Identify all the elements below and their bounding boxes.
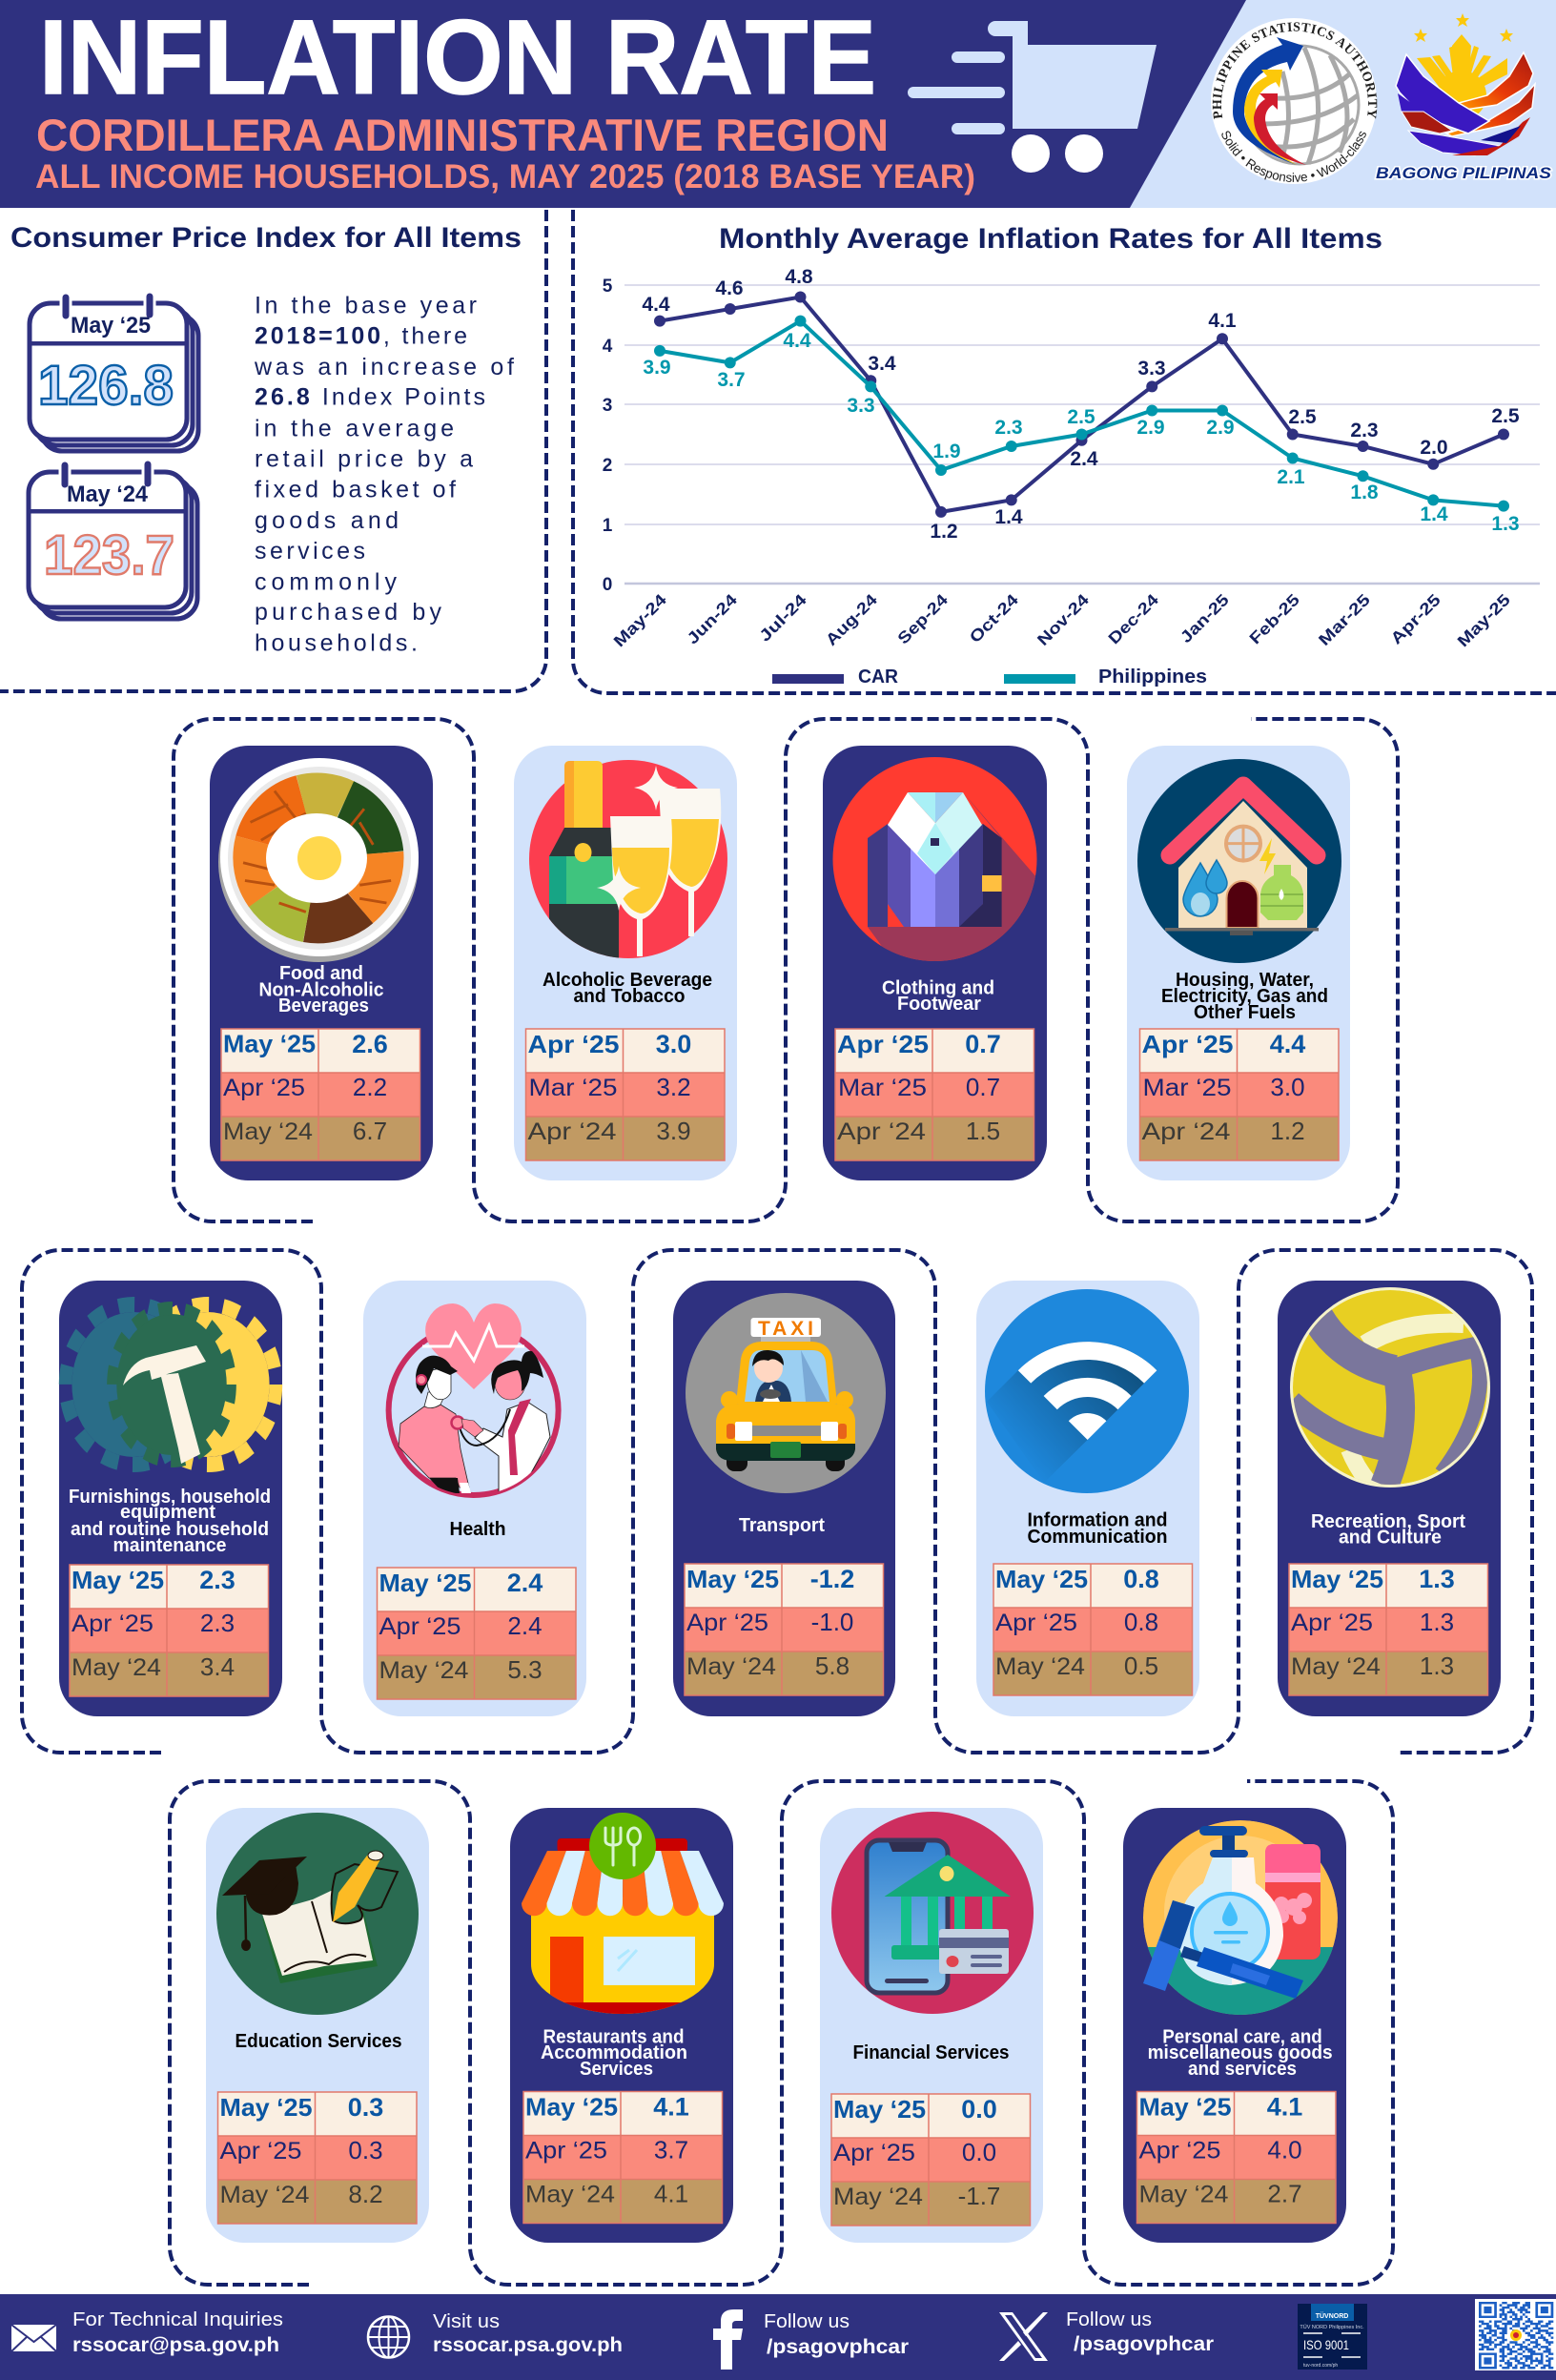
table: May ‘25 [72, 1566, 164, 1594]
series: CAR: 4.8 [785, 266, 813, 288]
category name [1028, 1510, 1167, 1548]
table: May ‘24 [686, 1653, 776, 1680]
icon: champagne [529, 760, 727, 963]
heading: monthly average inflation: Monthly Average Inflation Rates for All Items [719, 223, 1382, 255]
table: Apr ‘25 [379, 1613, 461, 1640]
category name: miscellaneous goods [1148, 2042, 1333, 2063]
table: Apr ‘25 [1138, 2138, 1220, 2165]
icon: shopping cart [908, 21, 1157, 173]
contact: website: Visit us [433, 2311, 500, 2332]
category name: Clothing and [882, 978, 994, 999]
series: Philippines: 4.4 [783, 330, 811, 352]
table [831, 2094, 1030, 2226]
table: 0.7 [965, 1030, 1001, 1058]
table: Apr ‘25 [219, 2138, 301, 2165]
x axis labels: Sep-24 [894, 590, 952, 647]
explanatory text: purchased by [255, 599, 442, 626]
table: Apr ‘25 [837, 1030, 929, 1058]
calendar: May 2024: 123.7 [44, 524, 174, 586]
series: Philippines [643, 316, 1520, 535]
table: May ‘24 [525, 2182, 615, 2208]
panel: food and non-alcoholic beverages [210, 746, 433, 1180]
table: May ‘24 [1291, 1653, 1381, 1680]
x axis labels: Dec-24 [1105, 590, 1162, 647]
line chart: 4 [603, 337, 613, 357]
category name: Personal care, and [1162, 2027, 1322, 2048]
category name: and Tobacco [574, 986, 685, 1007]
x axis labels: May-25 [1454, 590, 1514, 650]
table: 2.3 [199, 1566, 235, 1594]
calendar: May 2025 [30, 292, 198, 451]
logo: Bagong Pilipinas [1376, 13, 1552, 182]
table: May ‘24 [995, 1653, 1085, 1680]
table: 1.3 [1420, 1608, 1454, 1636]
series: CAR: 3.3 [1137, 358, 1166, 380]
panel: housing, water, electricity, gas [1127, 746, 1350, 1180]
table: Apr ‘25 [223, 1075, 305, 1101]
logo: Philippine Statistics Authority: PHILIPPINE STATISTICS AUTHORITY [1213, 22, 1377, 120]
x axis labels: Oct-24 [966, 590, 1022, 646]
table: 1.3 [1420, 1652, 1454, 1680]
contact: website [368, 2311, 623, 2357]
panel: recreation, sport and culture [1278, 1281, 1501, 1716]
category name: Information and [1028, 1510, 1167, 1531]
calendar: May 2025: May ‘25 [71, 313, 151, 339]
badge: ISO 9001: TÜVNORD [1316, 2311, 1348, 2320]
category name: Beverages [278, 995, 369, 1016]
series: CAR: 2.5 [1491, 405, 1520, 427]
series: CAR [642, 266, 1520, 543]
category name: Recreation, Sport [1311, 1511, 1465, 1532]
table: 0.5 [1124, 1652, 1158, 1680]
table: Apr ‘25 [72, 1611, 154, 1637]
table [1289, 1564, 1487, 1695]
table: 0.7 [966, 1073, 1000, 1101]
table [993, 1564, 1192, 1695]
icon: house with utilities [1137, 759, 1341, 963]
icon: doctor and patient [389, 1303, 559, 1497]
panel: health [363, 1281, 586, 1716]
category name [541, 2027, 687, 2080]
table: 1.5 [966, 1117, 1000, 1145]
contact: X: Follow us [1066, 2309, 1152, 2330]
x axis labels: Mar-25 [1315, 590, 1374, 649]
category name [259, 963, 383, 1016]
series: CAR: 4.4 [642, 294, 670, 316]
table: May ‘25 [833, 2095, 926, 2124]
series: Philippines: 1.3 [1491, 513, 1520, 535]
table: 3.0 [656, 1030, 691, 1058]
explanatory text: 2018=100, there [255, 323, 467, 350]
badge: ISO 9001: tuv-nord.com/ph [1303, 2363, 1338, 2369]
icon: mobile banking [831, 1812, 1034, 2014]
x axis labels: Aug-24 [822, 590, 881, 649]
line chart: 5 [603, 277, 613, 297]
table: Apr ‘24 [1142, 1118, 1231, 1145]
series: Philippines: 1.8 [1350, 482, 1379, 503]
logo: Philippine Statistics Authority [1211, 18, 1377, 184]
calendar: May 2025: 126.8 [38, 355, 174, 417]
table [221, 1029, 420, 1160]
table: 0.3 [348, 2136, 383, 2165]
x axis labels: Jun-24 [684, 590, 741, 647]
table: May ‘25 [1138, 2092, 1232, 2121]
panel: alcoholic beverage and tobacco [514, 746, 737, 1180]
category name [1311, 1511, 1465, 1549]
category name: and services [1188, 2059, 1297, 2080]
table: May ‘24 [72, 1654, 161, 1681]
icon: taxi: TAXI [758, 1318, 813, 1340]
table: -1.7 [958, 2182, 1000, 2210]
table: Apr ‘24 [528, 1118, 617, 1145]
line chart: 3 [603, 396, 612, 416]
series: CAR: 4.6 [715, 277, 744, 299]
line chart: 2 [603, 456, 612, 476]
table: May ‘25 [1291, 1565, 1383, 1593]
series: CAR: 2.3 [1350, 420, 1379, 441]
panel: transport [673, 1281, 895, 1716]
category name: equipment [120, 1502, 215, 1523]
category name [543, 970, 712, 1007]
icon: personal care products [1143, 1820, 1338, 2016]
table: Mar ‘25 [838, 1075, 927, 1101]
series: Philippines: 1.4 [1420, 503, 1448, 525]
table: 2.2 [353, 1073, 387, 1101]
table: May ‘24 [219, 2182, 310, 2208]
table: 2.6 [352, 1030, 388, 1058]
line chart [603, 266, 1540, 650]
badge: ISO 9001 [1298, 2304, 1367, 2370]
category name: Footwear [897, 994, 981, 1015]
x axis labels: Apr-25 [1387, 590, 1444, 647]
series: Philippines: 3.3 [847, 395, 875, 417]
table: 2.4 [507, 1611, 543, 1640]
table: 0.3 [348, 2093, 383, 2122]
table: Apr ‘25 [686, 1610, 768, 1636]
series: CAR: 3.4 [868, 353, 896, 375]
table: 4.4 [1270, 1030, 1305, 1058]
table: May ‘24 [833, 2184, 923, 2210]
explanatory text: was an increase of [254, 354, 514, 380]
explanatory text: 26.8 Index Points [255, 384, 485, 411]
category name: Communication [1028, 1527, 1167, 1548]
table: May ‘25 [223, 1030, 316, 1058]
footer [0, 2294, 1556, 2380]
category name: Services [580, 2059, 653, 2080]
category name: Transport [739, 1515, 825, 1536]
table: 0.0 [962, 2138, 996, 2166]
series: CAR: 4.1 [1208, 310, 1237, 332]
category name: Restaurants and [543, 2027, 685, 2048]
table: 4.1 [653, 2092, 689, 2121]
table: 1.3 [1419, 1565, 1455, 1593]
category name: Financial Services [852, 2042, 1009, 2063]
table: May ‘25 [686, 1565, 779, 1593]
explanatory text: goods and [255, 507, 399, 534]
table: -1.0 [811, 1608, 853, 1636]
calendar: May 2024 [29, 460, 197, 619]
calendar: May 2024: May ‘24 [67, 482, 149, 507]
icon: graduation cap and book [216, 1813, 419, 2015]
series: Philippines: 2.1 [1277, 466, 1305, 488]
table: 4.1 [654, 2180, 688, 2208]
category name: Furnishings, household [69, 1487, 271, 1508]
legend [772, 667, 1207, 687]
category name: Alcoholic Beverage [543, 970, 712, 991]
table: May ‘25 [995, 1565, 1088, 1593]
table: 2.4 [507, 1569, 543, 1597]
series: Philippines: 2.3 [994, 417, 1023, 439]
logo: Philippine Statistics Authority: Solid • Responsive • World-class [1221, 131, 1366, 182]
explanatory text: fixed basket of [255, 476, 456, 503]
table: Mar ‘25 [1142, 1075, 1232, 1101]
table [526, 1029, 725, 1160]
contact: website: rssocar.psa.gov.ph [433, 2334, 623, 2356]
badge: ISO 9001: ISO 9001 [1303, 2337, 1349, 2352]
table: 3.7 [654, 2136, 688, 2165]
contact: X: /psagovphcar [1074, 2333, 1214, 2355]
icon: wifi signal [985, 1289, 1189, 1493]
table: May ‘24 [223, 1118, 313, 1145]
table [523, 2092, 723, 2224]
table: 3.4 [200, 1652, 235, 1681]
table: 3.0 [1270, 1073, 1305, 1101]
panel: monthly inflation chart [573, 210, 1556, 693]
table: Mar ‘25 [528, 1075, 618, 1101]
table: Apr ‘25 [995, 1610, 1077, 1636]
icon: shirt and jacket [833, 757, 1037, 961]
explanatory text: In the base year [255, 292, 477, 318]
table: 0.0 [961, 2095, 997, 2124]
category name: Health [450, 1519, 505, 1540]
panel: restaurants and accommodation [510, 1808, 733, 2243]
heading: consumer price index: Consumer Price Index for All Items [10, 222, 522, 254]
panel: clothing and footwear [823, 746, 1049, 1180]
x axis labels: Feb-25 [1246, 590, 1303, 647]
table: 3.2 [656, 1073, 691, 1101]
series: CAR: 2.0 [1420, 437, 1448, 459]
table: May ‘24 [379, 1657, 469, 1684]
explanatory text [254, 292, 514, 656]
icon: gears and hammer [66, 1304, 276, 1465]
series: CAR: 2.4 [1070, 448, 1098, 470]
x axis labels: Jul-24 [756, 590, 810, 646]
category name: and Culture [1339, 1528, 1442, 1549]
series: Philippines: 2.5 [1067, 406, 1095, 428]
icon: bibimbap plate [218, 758, 419, 962]
series: Philippines: 1.9 [932, 441, 961, 462]
table [70, 1565, 269, 1696]
panel: financial services [820, 1808, 1043, 2243]
series: CAR: 2.5 [1288, 406, 1317, 428]
table: Apr ‘24 [837, 1118, 926, 1145]
explanatory text: households. [255, 629, 418, 656]
category name: maintenance [113, 1535, 227, 1556]
category name: Non-Alcoholic [259, 980, 383, 1001]
badge: ISO 9001: TÜV NORD Philippines Inc. [1300, 2324, 1364, 2330]
line chart: 1 [603, 516, 613, 536]
category name [882, 978, 994, 1015]
table: 0.8 [1124, 1608, 1158, 1636]
table [835, 1029, 1034, 1160]
contact: facebook: /psagovphcar [767, 2336, 909, 2358]
logo: Bagong Pilipinas: BAGONG PILIPINAS [1376, 164, 1552, 182]
table: 5.8 [815, 1652, 850, 1680]
table: -1.2 [810, 1565, 854, 1593]
x axis labels: May-24 [610, 590, 670, 650]
contact: email [11, 2309, 283, 2356]
panel: consumer price index [0, 210, 546, 691]
table: 5.3 [507, 1655, 543, 1684]
table: 3.9 [656, 1117, 691, 1145]
panel: furnishings [59, 1281, 282, 1716]
series: CAR: 1.2 [930, 521, 958, 543]
series: Philippines: 2.9 [1206, 417, 1235, 439]
table: Apr ‘25 [528, 1030, 620, 1058]
table: 8.2 [348, 2180, 383, 2208]
x axis labels [610, 590, 1514, 650]
explanatory text: retail price by a [255, 446, 473, 473]
contact: facebook: Follow us [764, 2311, 850, 2332]
table: 1.2 [1270, 1117, 1305, 1145]
table: Apr ‘25 [525, 2138, 607, 2165]
table: Apr ‘25 [833, 2140, 915, 2166]
subtitle: region: CORDILLERA ADMINISTRATIVE REGION [36, 110, 889, 160]
series: Philippines: 3.9 [643, 357, 671, 379]
contact: email: For Technical Inquiries [72, 2309, 283, 2330]
table: 0.8 [1123, 1565, 1159, 1593]
category name: Food and [279, 963, 363, 984]
category name [69, 1487, 271, 1556]
series: Philippines: 3.7 [717, 369, 746, 391]
legend: CAR [858, 667, 899, 687]
table: 6.7 [353, 1117, 387, 1145]
icon: volleyball [1290, 1287, 1490, 1492]
table: 4.1 [1267, 2092, 1302, 2121]
table [378, 1568, 576, 1699]
table: 2.7 [1267, 2180, 1302, 2208]
category name: and routine household [71, 1519, 269, 1540]
explanatory text: services [255, 538, 365, 564]
legend: Philippines [1098, 667, 1207, 687]
x axis labels: Nov-24 [1034, 590, 1093, 649]
line chart: 0 [603, 575, 612, 595]
table: Apr ‘25 [1142, 1030, 1234, 1058]
category name: Other Fuels [1194, 1002, 1296, 1023]
header banner [0, 0, 1556, 208]
category name: Accommodation [541, 2042, 687, 2063]
category name [1148, 2027, 1333, 2080]
category name: Education Services [235, 2031, 402, 2052]
table: Apr ‘25 [1291, 1610, 1373, 1636]
icon: taxi [686, 1293, 886, 1493]
category name [1161, 970, 1328, 1023]
contact: X [999, 2309, 1214, 2361]
table [1136, 2092, 1336, 2224]
category name: Electricity, Gas and [1161, 986, 1328, 1007]
explanatory text: in the average [255, 415, 454, 441]
table: May ‘25 [525, 2092, 618, 2121]
panel: information and communication [976, 1281, 1199, 1716]
icon: restaurant storefront [522, 1813, 724, 2016]
table [217, 2092, 417, 2224]
table: May ‘24 [1138, 2182, 1229, 2208]
series: Philippines: 2.9 [1136, 417, 1165, 439]
table: May ‘25 [219, 2093, 313, 2122]
category name: Housing, Water, [1176, 970, 1314, 991]
table: 4.0 [1267, 2136, 1302, 2165]
panel: education services [206, 1808, 429, 2243]
QR code [1475, 2299, 1556, 2370]
table [1140, 1029, 1339, 1160]
contact: facebook [713, 2309, 909, 2370]
table [685, 1564, 883, 1695]
table: May ‘25 [379, 1569, 471, 1597]
x axis labels: Jan-25 [1177, 590, 1233, 646]
title: INFLATION RATE [39, 0, 876, 116]
explanatory text: commonly [255, 568, 397, 595]
contact: email: rssocar@psa.gov.ph [72, 2334, 279, 2356]
table: 2.3 [200, 1609, 235, 1637]
subtitle: coverage: ALL INCOME HOUSEHOLDS, MAY 2025 (2018 BASE YEAR) [35, 158, 975, 195]
panel: personal care [1123, 1808, 1346, 2243]
series: CAR: 1.4 [994, 506, 1023, 528]
